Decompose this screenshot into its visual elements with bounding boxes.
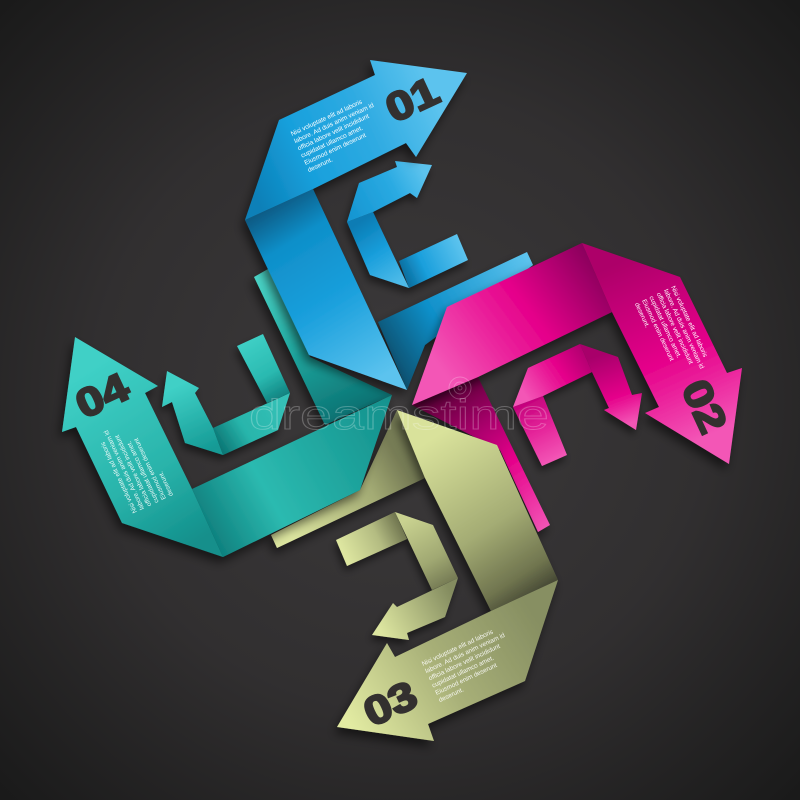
text block 03: Nisi voluptate elit ad laboris bbox=[421, 629, 494, 668]
text block 01: labore. Ad duis anim veniam id bbox=[293, 102, 376, 145]
text block 04: labore. Ad duis anim veniam id bbox=[103, 428, 146, 511]
text block 01: Eiusmod enim deserunt bbox=[303, 132, 367, 167]
number 02: 02 bbox=[673, 373, 735, 440]
text block 01: deserunt. bbox=[307, 156, 334, 174]
teal arrow head bbox=[62, 337, 223, 557]
number 01: 01 bbox=[379, 69, 446, 131]
arrow 01 main blue bbox=[245, 60, 467, 390]
green tail strip bbox=[271, 410, 425, 548]
text block 04: Nisi voluptate elit ad laboris bbox=[100, 441, 139, 514]
back strips: tails passing under the neighbouring arrows bbox=[254, 252, 550, 548]
arrow 03 small green arrow bbox=[336, 512, 458, 640]
arrow 04 small teal arrow bbox=[162, 334, 290, 455]
text block 02: Nisi voluptate elit ad laboris bbox=[669, 285, 708, 358]
arrow 01 small blue arrow bbox=[347, 161, 468, 288]
text block 03: deserunt. bbox=[438, 686, 465, 704]
text block 01: Nisi voluptate elit ad laboris bbox=[290, 99, 363, 138]
text block 02: cupidatat ullamco amet. bbox=[647, 295, 682, 359]
watermark: dreamstime bbox=[249, 391, 549, 438]
text block 01: officia labore velit incididunt bbox=[297, 113, 371, 152]
text block 03: officia labore velit incididunt bbox=[428, 643, 502, 682]
text block 02: Eiusmod enim deserunt bbox=[640, 298, 675, 362]
pink arrow head bbox=[582, 243, 742, 464]
arrow 02 small pink arrow bbox=[513, 344, 642, 466]
teal band bbox=[192, 395, 392, 557]
arrow 02 main pink bbox=[412, 243, 742, 464]
number 04: 04 bbox=[69, 365, 136, 427]
text block 02: deserunt. bbox=[633, 302, 651, 329]
green body bbox=[397, 410, 558, 611]
pink band bbox=[412, 243, 612, 405]
pink tail strip bbox=[412, 377, 550, 532]
number 03: 03 bbox=[357, 673, 424, 735]
text block 02: officia labore velit incididunt bbox=[655, 292, 694, 366]
text block 04: deserunt. bbox=[157, 470, 175, 497]
teal tail strip bbox=[254, 269, 392, 425]
text block 03: cupidatat ullamco amet. bbox=[431, 655, 495, 690]
blue tail strip bbox=[378, 252, 533, 390]
arrow 04 main teal bbox=[62, 337, 392, 557]
text block 04: Eiusmod enim deserunt bbox=[133, 437, 168, 501]
watermark bbox=[249, 377, 549, 438]
text block 04: cupidatat ullamco amet. bbox=[126, 440, 161, 504]
blue body bbox=[245, 189, 407, 390]
green arrow head bbox=[337, 580, 558, 741]
text block 03: Eiusmod enim deserunt bbox=[434, 662, 498, 697]
text block 03: labore. Ad duis anim veniam id bbox=[424, 632, 507, 675]
text block 02: labore. Ad duis anim veniam id bbox=[662, 288, 705, 371]
arrow 03 main green bbox=[337, 410, 558, 741]
blue arrow head bbox=[245, 60, 467, 220]
text block 04: officia labore velit incididunt bbox=[114, 433, 153, 507]
text block 01: cupidatat ullamco amet. bbox=[300, 125, 364, 160]
